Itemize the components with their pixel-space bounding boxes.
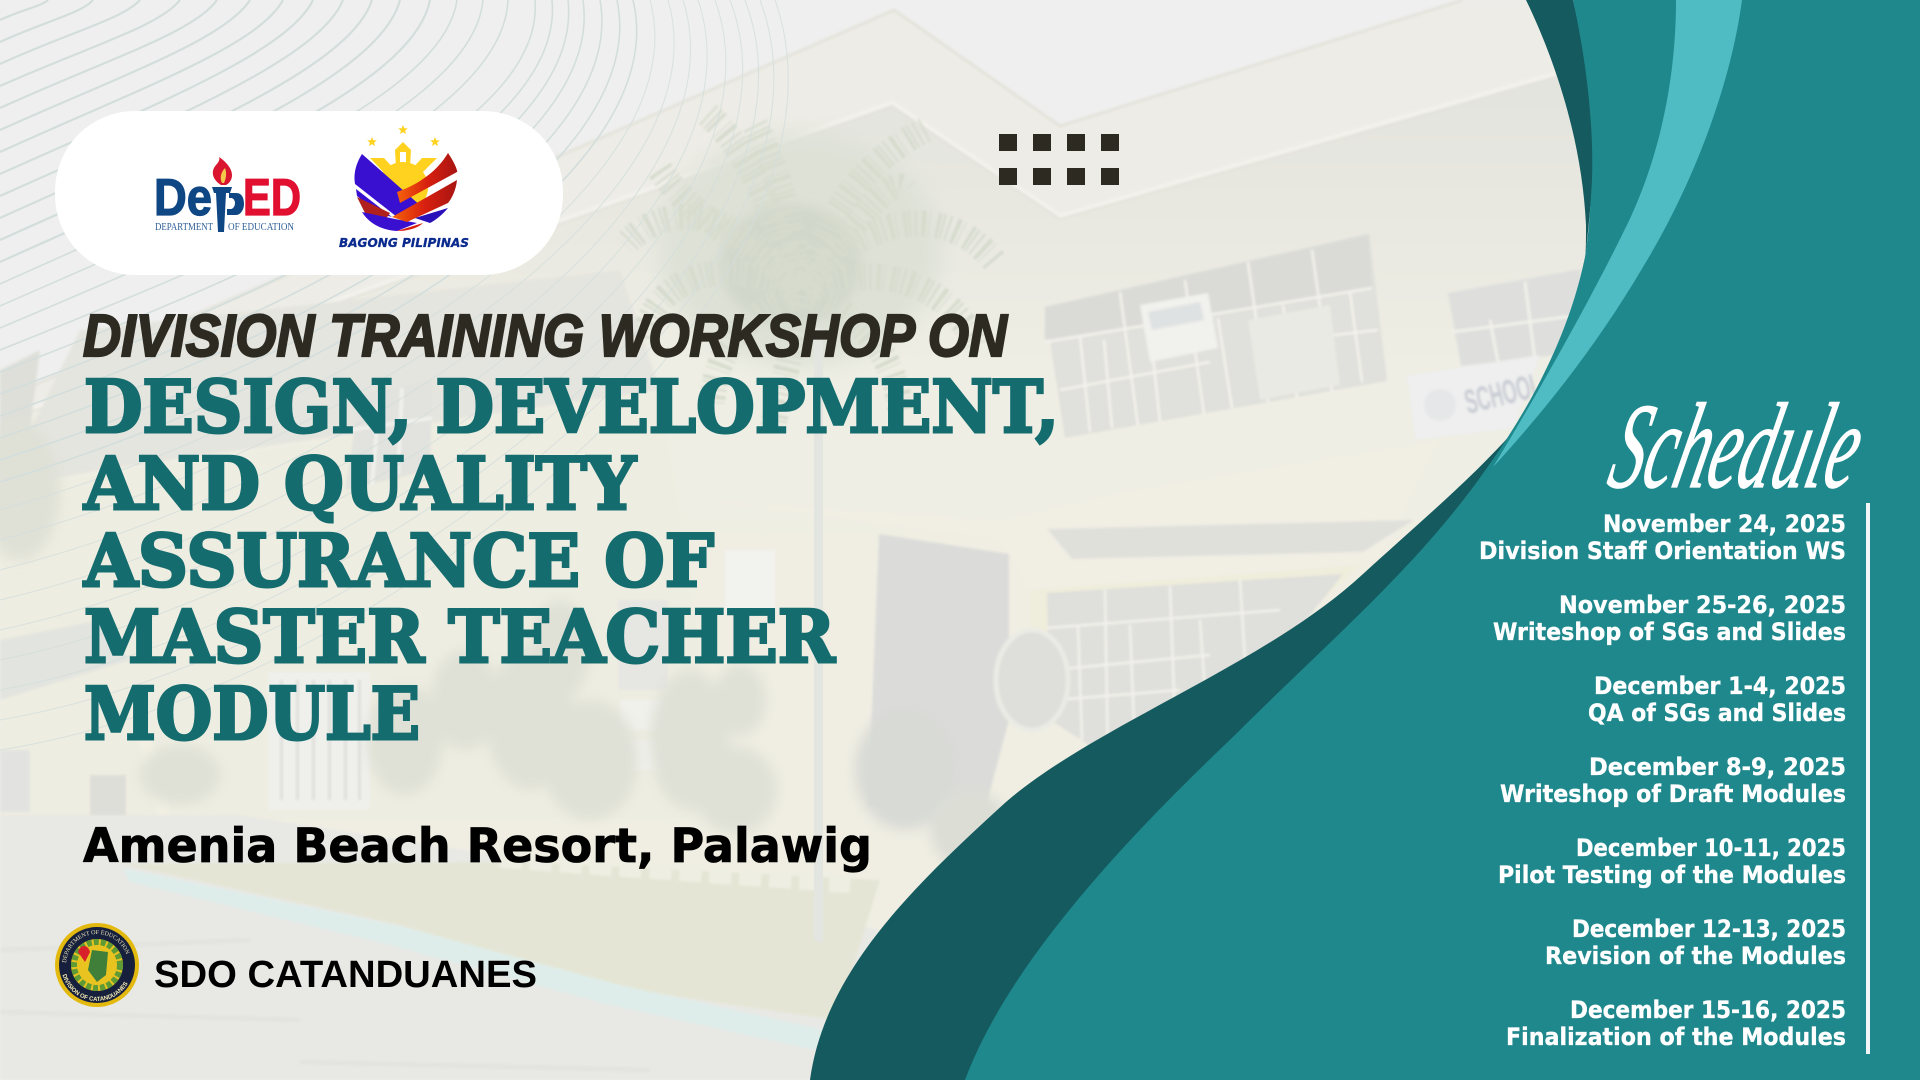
stone border — [500, 860, 850, 885]
wave panel: dark lower band — [810, 433, 1530, 1080]
item: December 8-9: December 8-9, 2025 — [1589, 753, 1846, 781]
shrine arch — [996, 630, 1068, 730]
logo: DepED: De — [154, 169, 212, 227]
item: December 12-13: December 12-13, 2025 — [1572, 915, 1846, 943]
item: December 10-11: Pilot Testing of the Modules — [1498, 861, 1846, 889]
schedule list — [1479, 510, 1846, 1051]
icon: SDO seal — [55, 923, 139, 1007]
item: November 25-26: Writeshop of SGs and Slides — [1493, 618, 1846, 646]
venue: Amenia Beach Resort, Palawig — [83, 819, 872, 874]
schedule divider — [1866, 503, 1870, 1054]
item: December 10-11: December 10-11, 2025 — [1576, 834, 1846, 862]
logo: DepED: DEPARTMENT — [155, 222, 213, 233]
title: main heading — [83, 364, 1059, 756]
item: December 1-4: QA of SGs and Slides — [1588, 699, 1846, 727]
title: main heading: AND QUALITY — [83, 441, 638, 526]
item: December 12-13: Revision of the Modules — [1545, 942, 1846, 970]
item: November 24: November 24, 2025 — [1603, 510, 1846, 538]
item: December 8-9: Writeshop of Draft Modules — [1500, 780, 1846, 808]
logo: DepED: ED — [243, 169, 301, 227]
item: December 1-4: December 1-4, 2025 — [1594, 672, 1846, 700]
palm tree — [625, 112, 995, 930]
item: November 25-26: November 25-26, 2025 — [1559, 591, 1846, 619]
item: December 8-9 — [1500, 753, 1846, 808]
title: main heading: MODULE — [84, 671, 420, 756]
item: December 15-16: Finalization of the Modules — [1506, 1023, 1846, 1051]
item: November 24 — [1479, 510, 1846, 565]
logo: DepED: OF EDUCATION — [228, 222, 294, 233]
item: December 12-13 — [1545, 915, 1846, 970]
logo pill — [55, 111, 563, 275]
logo: Bagong Pilipinas — [339, 125, 469, 250]
decorative dot grid — [999, 134, 1119, 185]
icon: SDO seal: DEPARTMENT OF EDUCATION — [62, 930, 130, 963]
wave panel: light teal band — [1493, 0, 1742, 467]
upper window — [1045, 234, 1387, 438]
item: November 25-26 — [1493, 591, 1846, 646]
logo: DepED — [154, 157, 301, 233]
title: subtitle line: DIVISION TRAINING WORKSHOP ON — [83, 303, 1008, 369]
wave panel: main teal — [965, 0, 1920, 1080]
background photo: school building: SCHOOL — [1461, 366, 1546, 422]
wave panel: dark upper sliver — [1526, 0, 1594, 262]
ground — [0, 815, 880, 1080]
item: November 24: Division Staff Orientation WS — [1479, 537, 1846, 565]
decorative arc lines — [0, 0, 788, 750]
item: December 15-16 — [1506, 996, 1846, 1051]
title: main heading: MASTER TEACHER — [84, 594, 836, 679]
item: December 10-11 — [1498, 834, 1846, 889]
icon: SDO seal: DIVISION OF CATANDUANES — [62, 974, 128, 1002]
lower window — [1047, 574, 1343, 770]
organisation name: SDO CATANDUANES — [154, 954, 537, 996]
title: main heading: ASSURANCE OF — [83, 518, 714, 603]
title: main heading: DESIGN, DEVELOPMENT, — [84, 364, 1059, 449]
item: December 1-4 — [1588, 672, 1846, 727]
logo: Bagong Pilipinas: BAGONG PILIPINAS — [339, 236, 469, 250]
item: December 15-16: December 15-16, 2025 — [1570, 996, 1846, 1024]
